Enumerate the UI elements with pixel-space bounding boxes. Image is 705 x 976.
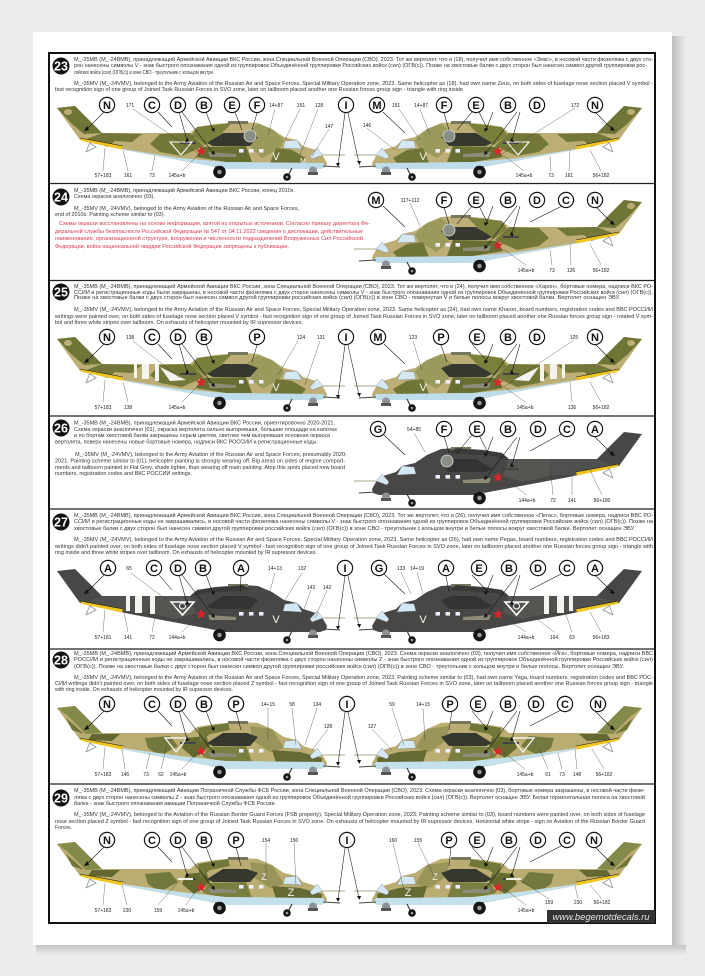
callouts 27: 65 xyxy=(126,566,132,572)
callouts 29: N xyxy=(590,835,598,847)
callouts 24: M xyxy=(371,195,381,207)
English description 24 xyxy=(55,206,299,218)
Russian description 23: М_-35МВ (М_-24ВМВ), принадлежащий Армейской Авиации ВКС России, зона Специальной Военной Операции (СВО), 2023. Тот же вертолет, что и (18), получил имя собственное «Зевс», в носовой части фюзеляжа с двух сто- xyxy=(74,56,653,63)
callouts 25: B xyxy=(504,332,512,344)
badge 27 xyxy=(52,514,70,530)
callouts 28: 62 xyxy=(158,772,164,778)
callouts 26: 144a+b xyxy=(519,498,536,504)
callouts 27: 63 xyxy=(569,635,575,641)
callouts 29: D xyxy=(174,835,182,847)
callouts 26: C xyxy=(563,424,571,436)
callouts 23: 172 xyxy=(571,103,579,109)
callouts 28: N xyxy=(594,699,602,711)
badge 28: 28 xyxy=(54,654,68,668)
callouts 27 xyxy=(84,560,615,641)
Russian description 23 xyxy=(74,56,653,76)
callouts 27: B xyxy=(199,563,207,575)
panel: scheme 23 xyxy=(52,56,653,181)
callouts 24: 56+182 xyxy=(593,268,610,274)
callouts 24: 126 xyxy=(567,268,575,274)
English description 28 xyxy=(55,675,653,693)
English description 29: nose section placed Z symbol - fast recognition sign of one group of Joined Task Russian Forces in SVO zone. On exhausts of helicopter mounted by IR supressor devices. Horizontal white stripe - sign on Aviation of the Russian Border Guard xyxy=(55,819,645,825)
callouts 24: C xyxy=(562,195,570,207)
callouts 25: P xyxy=(253,332,261,344)
Russian description 23: сийских войск (сил) (ОГВ(с)) в зоне СВО - треугольник с кольцом внутри. xyxy=(74,69,214,76)
callouts 28: 14+15 xyxy=(261,702,275,708)
badge 25 xyxy=(52,284,70,300)
callouts 27: 14+19 xyxy=(410,566,424,572)
panel: scheme 29 xyxy=(52,787,645,917)
callouts 25: 56+182 xyxy=(593,405,610,411)
callouts 27: 72 xyxy=(149,635,155,641)
English description 25: bol and three white stripes over tailboom. On exhausts of helicopter mounted by IR supressor devices. xyxy=(55,320,303,326)
callouts 23: D xyxy=(174,100,182,112)
callouts 28: 128 xyxy=(324,724,332,730)
callouts 28: B xyxy=(200,699,208,711)
callouts 27: 132 xyxy=(298,566,306,572)
callouts 28: E xyxy=(474,699,482,711)
callouts 23: 145a+b xyxy=(516,173,533,179)
callouts 29: 155 xyxy=(414,838,422,844)
callouts 25: C xyxy=(148,332,156,344)
callouts 29: B xyxy=(505,835,513,847)
callouts 28: P xyxy=(232,699,240,711)
callouts 25: I xyxy=(344,332,348,344)
English description 25: writings were painted over, on both sides of fuselage nose section placed V symbol - fast recognition sign of one group of Joined Task Russian Forces in SVO zone, later on tailboom placed another one Russian forces group sign - rotated V sym- xyxy=(55,314,653,320)
callouts 27: A xyxy=(237,563,245,575)
callouts 23: 151 xyxy=(392,103,400,109)
callouts 29: N xyxy=(103,835,111,847)
callouts 28: 59 xyxy=(389,702,395,708)
callouts 25: D xyxy=(174,332,182,344)
callouts 27: G xyxy=(375,563,383,575)
helicopter right 23: V xyxy=(419,151,427,163)
helicopter left 29: Z xyxy=(261,872,267,882)
Russian description 26: М_-35МВ (М_-24ВМВ), принадлежащий Армейской Авиации ВКС России, ориентировочно 2020-2021. xyxy=(74,420,335,426)
callouts 25 xyxy=(84,329,615,411)
Russian description 25: М_-35МВ (М_-24ВМВ), принадлежащий Армейской Авиации ВКС России, зона Специальной Военной Операции (СВО), 2023. Тот же вертолет, что и (24), получил имя собственное «Харон», бортовые номера, надписи ВКС РО- xyxy=(74,283,653,290)
callouts 28: 134 xyxy=(313,702,321,708)
callouts 27: D xyxy=(174,563,182,575)
callouts 28: 14+15 xyxy=(416,702,430,708)
callouts 23: 147 xyxy=(325,124,333,130)
callouts 25: 124 xyxy=(297,335,305,341)
Russian description 29: ляжа с двух сторон нанесены символы Z - знак быстрого опознавания одной из группировок Объединённой группировки Российских войск (сил) (ОГВ(с)). Вертолет оснащен ЭВУ. Белая горизонтальная полоса на хвостовой xyxy=(74,794,645,801)
callouts 24: 117+112 xyxy=(401,198,420,204)
Russian description 28: М_-35МВ (М_-24ВМВ), принадлежащий Армейской Авиации ВКС России, зона Специальной Военной Операции (СВО), 2023. Схема окраски аналогично (03), получил имя собственное «Йга», бортовые номера, надписи ВВС xyxy=(74,649,653,657)
callouts 29: C xyxy=(148,835,156,847)
callouts 29: E xyxy=(473,835,481,847)
callouts 28: C xyxy=(561,699,569,711)
callouts 24: N xyxy=(591,195,599,207)
outer frame xyxy=(49,53,655,923)
callouts 26: E xyxy=(473,424,481,436)
callouts 23: E xyxy=(228,100,236,112)
red notice 24: деральной службы безопасности Российской Федерации № 547 от 04.11.2022 сведения о дислокации, действительные xyxy=(55,228,363,235)
callouts 28: C xyxy=(148,699,156,711)
callouts 25: 123 xyxy=(409,335,417,341)
panel: scheme 24 xyxy=(52,187,642,275)
Russian description 27: ССИИ и регистрационные коды не закрашивались, в носовой части фюзеляжа нанесены символы V - знак быстрого опознавания одной из группировок Объединённой группировки Российских войск (сил) (ОГВ(с)). Позже на xyxy=(74,518,653,525)
callouts 24: D xyxy=(533,195,541,207)
callouts 27: A xyxy=(591,563,599,575)
callouts 27: 133 xyxy=(397,566,405,572)
callouts 27: 57+181 xyxy=(95,635,112,641)
callouts 23: 171 xyxy=(126,103,134,109)
panel: scheme 25 xyxy=(52,283,653,412)
callouts 29: P xyxy=(232,835,240,847)
Russian description 28: (ОГВ(с)). Позже на хвостовые балки с двух сторон был нанесен символ другой группировки российских войск (сил) (ОГВ(с)) в зоне СВО - треугольник с кольцом внутри и белые полосы. Вертолет оснащен ЭВУ. xyxy=(74,663,624,670)
callouts 27: C xyxy=(563,563,571,575)
badge 29 xyxy=(52,790,70,806)
callouts 23: B xyxy=(504,100,512,112)
Russian description 25 xyxy=(74,283,653,301)
callouts 26: G xyxy=(374,424,382,436)
English description 28: with ring inside. On exhausts of helicopter mounted by IR supressor devices. xyxy=(55,687,233,693)
callouts 23: E xyxy=(472,100,480,112)
callouts 23: 14+87 xyxy=(414,103,428,109)
callouts 28: 145a+b xyxy=(517,772,534,778)
badge 26 xyxy=(52,420,70,436)
callouts 28: 58 xyxy=(289,702,295,708)
callouts 23: F xyxy=(441,100,448,112)
callouts 29: 230 xyxy=(123,908,131,914)
callouts 25: 57+183 xyxy=(95,405,112,411)
callouts 28: 57+183 xyxy=(95,772,112,778)
callouts 25: 136 xyxy=(568,405,576,411)
callouts 23: 57+183 xyxy=(95,173,112,179)
helicopter left 25: V xyxy=(272,382,280,394)
badge 24: 24 xyxy=(54,190,68,204)
Russian description 27 xyxy=(74,512,653,532)
callouts 25: 145a+b xyxy=(517,405,534,411)
helicopter right 26 xyxy=(354,432,642,507)
callouts 23: 161 xyxy=(124,173,132,179)
callouts 25: 138 xyxy=(126,335,134,341)
Russian description 28: РОССИИ и регистрационные коды не закрашивались, в носовой части фюзеляжа с двух сторон нанесены символы Z - знак быстрого опознавания одной из группировок Объединённой группировки Российских войск (сил) xyxy=(74,656,653,663)
callouts 29: 56+182 xyxy=(594,900,611,906)
callouts 29: 154 xyxy=(262,838,270,844)
English description 27: M_-35MV (M_-24VMV), belonged to the Army Aviation of the Russian Air and Space Forces, Special Military Operation zone, 2023. Same helicopter as (26), had own name Pegas, board numbers, registration codes and ВВС РОССИИ xyxy=(74,537,653,543)
Russian description 29: балке - знак быстрого опознавания авиации Пограничной Службы ФСБ России. xyxy=(74,800,276,807)
callouts 29: D xyxy=(534,835,542,847)
Russian description 28 xyxy=(74,649,653,670)
Russian description 27: хвостовые балки с двух сторон был нанесен символ другой группировки российских войск (сил) (ОГВ(с)) в зоне СВО - треугольник с кольцом внутри и белые полосы вокруг хвостовой балки. Вертолет оснащен ЭВУ. xyxy=(74,525,635,532)
Russian description 26: Схема окраски аналогично (01), окраска вертолета сильно выгоревшая, большие площади на капотах xyxy=(74,427,337,433)
callouts 29: 145a+b xyxy=(178,908,195,914)
helicopter right 27: V xyxy=(419,614,427,626)
Russian description 26 xyxy=(55,420,337,446)
callouts 28: 73 xyxy=(143,772,149,778)
callouts 28: B xyxy=(504,699,512,711)
callouts 26: 72 xyxy=(550,498,556,504)
callouts 28: 61 xyxy=(545,772,551,778)
callouts 23: 14+87 xyxy=(269,103,283,109)
helicopter left 27: V xyxy=(272,614,280,626)
callouts 25: 125 xyxy=(570,335,578,341)
callouts 25: P xyxy=(437,332,445,344)
callouts 27: 144a+b xyxy=(518,635,535,641)
callouts 23: M xyxy=(372,100,382,112)
callouts 25: E xyxy=(473,332,481,344)
callouts 27: E xyxy=(475,563,483,575)
callouts 29: 159 xyxy=(545,900,553,906)
callouts 23: I xyxy=(344,100,348,112)
callouts 27: 164 xyxy=(550,635,558,641)
callouts 27: C xyxy=(150,563,158,575)
English description 29: Forces. xyxy=(55,825,72,831)
Russian description 29 xyxy=(74,787,645,807)
callouts 29: P xyxy=(445,835,453,847)
Russian description 24 xyxy=(74,187,295,200)
callouts 26: F xyxy=(441,424,448,436)
callouts 24 xyxy=(368,192,615,274)
panel: scheme 27 xyxy=(52,512,653,644)
English description 28: СИИ writings didn't painted over, on both sides of fuselage nose section placed Z symbol - fast recognition sign of one group of Joined Task Russian Forces in SVO zone, later on tailboom placed another one Russian forces group sign - triangle xyxy=(55,681,653,687)
English description 27: writings didn't painted over, on both sides of fuselage nose section placed V symbol - fast recognition sign of one group of Joined Task Russian Forces in SVO zone, later on tailboom placed another one Russian forces group sign - triangle with xyxy=(55,544,653,550)
helicopter right 29 xyxy=(354,842,642,917)
English description 26 xyxy=(55,452,347,477)
helicopter left 29: Z xyxy=(288,887,295,899)
callouts 26: 141 xyxy=(568,498,576,504)
callouts 23: 73 xyxy=(548,173,554,179)
Russian description 25: ССИИ и регистрационные коды были закрашены, в носовой части фюзеляжа с двух сторон нанесены символы V - знак быстрого опознавания одной из группировок Объединённой группировки Российских войск (сил) (ОГВ(с)). xyxy=(74,289,653,296)
callouts 29: I xyxy=(345,835,349,847)
red notice 24: наименования, организационной структуре, вооружении и численности подразделений Вооруженных Сил Российской xyxy=(55,235,363,242)
badge 23: 23 xyxy=(54,60,68,74)
callouts 27: 142 xyxy=(323,585,331,591)
helicopter right 28 xyxy=(354,706,642,781)
callouts 24: 73 xyxy=(549,268,555,274)
callouts 23: N xyxy=(103,100,111,112)
English description 24: M_-35MV (M_-24VMV), belonged to the Army Aviation of the Russian Air and Space Forces, xyxy=(74,206,299,212)
helicopter left 23 xyxy=(57,106,345,181)
callouts 23: B xyxy=(200,100,208,112)
callouts 23: 73 xyxy=(149,173,155,179)
callouts 29: 230 xyxy=(574,900,582,906)
callouts 23: 161 xyxy=(565,173,573,179)
English description 28: M_-35MV (M_-24VMV), belonged to the Army Aviation of the Russian Air and Space Forces, Special Military Operation zone, 2023. Painting scheme similar to (03), had own name Yaga, board numbers, registration codes and ВВС РОС- xyxy=(74,675,653,681)
callouts 27: 56+183 xyxy=(593,635,610,641)
callouts 28: 145a+b xyxy=(170,772,187,778)
panel: scheme 26 xyxy=(52,420,642,507)
badge 23 xyxy=(52,58,70,74)
callouts 23: N xyxy=(591,100,599,112)
helicopter right 24 xyxy=(354,200,642,275)
callouts 26: D xyxy=(534,424,542,436)
helicopter right 27 xyxy=(354,569,642,644)
callouts 25: M xyxy=(373,332,383,344)
callouts 29: 159 xyxy=(154,908,162,914)
callouts 23: 145a+b xyxy=(169,173,186,179)
red notice 24 xyxy=(55,220,370,250)
English description 29 xyxy=(55,812,645,831)
callouts 29: 156 xyxy=(290,838,298,844)
callouts 23: C xyxy=(148,100,156,112)
callouts 28: 146 xyxy=(121,772,129,778)
callouts 23: D xyxy=(533,100,541,112)
callouts 24: 145a+b xyxy=(518,268,535,274)
callouts 25: D xyxy=(533,332,541,344)
callouts 27: 144a+b xyxy=(169,635,186,641)
callouts 26: B xyxy=(504,424,512,436)
helicopter right 23 xyxy=(354,106,642,181)
English description 26: 2021. Painting scheme similar to (01), helicopter painting is strongly wearing off. Big areas on sides of engine compart- xyxy=(55,458,345,464)
callouts 26 xyxy=(370,421,615,504)
helicopter left 25 xyxy=(57,337,345,412)
callouts 28: D xyxy=(174,699,182,711)
callouts 23: 56+182 xyxy=(593,173,610,179)
callouts 23: 128 xyxy=(315,103,323,109)
English description 23 xyxy=(55,81,653,93)
helicopter right 25: V xyxy=(419,382,427,394)
Russian description 25: Позже на хвостовые балки с двух сторон был нанесен символ другой группировки российских войск (сил) (ОГВ(с)) в зоне СВО - повернутая V и белые полосы вокруг хвостовой балки. Вертолет оснащен ЭВУ. xyxy=(74,294,620,301)
callouts 24: F xyxy=(441,195,448,207)
English description 29: M_-35MV (M_-24VMV), belonged to the Aviation of the Russian Border Guard Forces (FSB property), Special Military Operation zone, 2023. Painting scheme similar to (03), board numbers were painted over, on both sides of fuselage xyxy=(74,812,645,818)
badge 26: 26 xyxy=(54,422,68,436)
callouts 23: 146 xyxy=(363,123,371,129)
callouts 28: I xyxy=(345,699,349,711)
badge 27: 27 xyxy=(54,516,68,530)
callouts 27: 141 xyxy=(124,635,132,641)
callouts 27: B xyxy=(505,563,513,575)
callouts 29: 160 xyxy=(389,838,397,844)
callouts 25: 131 xyxy=(317,335,325,341)
English description 27 xyxy=(55,537,653,556)
Russian description 24: Схема окраски аналогично (03). xyxy=(74,194,155,200)
English description 23: M_-35MV (M_-24VMV), belonged to the Army Aviation of the Russian Air and Space Forces, Special Military Operation zone, 2023. Same helicopter as (18), had own name Zeus, on both sides of fuselage nose section placed V symbol - xyxy=(74,81,653,87)
Russian description 24: М_-35МВ (М_-24ВМВ), принадлежащий Армейской Авиации ВКС России, конец 2010х. xyxy=(74,187,295,194)
callouts 26: A xyxy=(591,424,599,436)
English description 26: numbers, registration codes and ВКС РОССИИ writings. xyxy=(55,471,192,477)
English description 23: fast recognition sign of one group of Joined Task Russian Forces in SVO zone, later on tailboom placed another one Russian forces group sign - triangle with ring inside xyxy=(55,87,463,93)
helicopter right 29: Z xyxy=(432,872,438,882)
helicopter right 25 xyxy=(354,337,642,412)
helicopter left 28 xyxy=(57,706,345,781)
English description 24: end of 2010s. Painting scheme similar to (03). xyxy=(55,212,165,218)
English description 25: M_-35MV (M_-24VMV), belonged to the Army Aviation of the Russian Air and Space Forces, Special Military Operation zone, 2023. Same helicopter as (24), had own name Kharon, board numbers, registration codes and ВВС РОССИИ xyxy=(74,307,653,313)
callouts 28: 73 xyxy=(559,772,565,778)
callouts 28: 56+182 xyxy=(596,772,613,778)
callouts 27: 14+13 xyxy=(268,566,282,572)
callouts 27: I xyxy=(343,563,347,575)
callouts 28: N xyxy=(103,699,111,711)
badge 25: 25 xyxy=(54,286,68,300)
callouts 29 xyxy=(84,832,615,914)
callouts 23 xyxy=(84,97,615,179)
callouts 28: P xyxy=(446,699,454,711)
English description 25 xyxy=(55,307,653,326)
badge 29: 29 xyxy=(54,792,68,806)
callouts 27: 143 xyxy=(307,585,315,591)
callouts 29: 57+183 xyxy=(95,908,112,914)
English description 27: ring inside and three white stripes over tailboom. On exhausts of helicopter mounted by IR supressor devices. xyxy=(55,550,317,556)
callouts 29: B xyxy=(200,835,208,847)
callouts 29: 145a+b xyxy=(518,908,535,914)
Russian description 23: рон нанесены символы V - знак быстрого опознавания одной из группировок Объединённой группировки Российских войск (сил) (ОГВ(с)). Позже на хвостовые балки с двух сторон был нанесен символ другой группировки рос- xyxy=(74,62,647,69)
callouts 28 xyxy=(84,696,615,778)
callouts 23: 151 xyxy=(297,103,305,109)
callouts 24: B xyxy=(504,195,512,207)
callouts 29: C xyxy=(563,835,571,847)
callouts 25: N xyxy=(591,332,599,344)
helicopter right 29: Z xyxy=(405,887,412,899)
callouts 27: D xyxy=(534,563,542,575)
Russian description 27: М_-35МВ (М_-24ВМВ), принадлежащий Армейской Авиации ВКС России, зона Специальной Военной Операции (СВО), 2023. Тот же вертолет, что и (26), получил имя собственное «Пегас», бортовые номера, надписи ВВС РО- xyxy=(74,512,653,519)
callouts 25: 145a+b xyxy=(169,405,186,411)
helicopter left 23: V xyxy=(272,151,280,163)
callouts 25: N xyxy=(103,332,111,344)
Russian description 26: и по бортам хвостовой балки закрашены серым цветом, светлее чем выгоревшая основная окраска xyxy=(74,432,330,439)
website badge: www.begemotdecals.ru xyxy=(553,911,650,922)
English description 26: M_-35MV (M_-24VMV), belonged to the Army Aviation of the Russian Air and Space Forces, presumably 2020- xyxy=(75,452,347,458)
callouts 26: 54+85 xyxy=(407,427,421,433)
callouts 23: F xyxy=(254,100,261,112)
callouts 24: E xyxy=(472,195,480,207)
callouts 27: A xyxy=(104,563,112,575)
red notice 24: Схемы окраски восстановлены на основе информации, взятой из открытых источников. Согласно приказу директора Фе- xyxy=(59,220,370,227)
badge 28 xyxy=(52,652,70,668)
callouts 25: 138 xyxy=(124,405,132,411)
callouts 25: B xyxy=(200,332,208,344)
red notice 24: Федерации, войск национальной гвардии Российской Федерации запрещены к публикации. xyxy=(55,243,289,250)
callouts 27: A xyxy=(442,563,450,575)
callouts 28: 127 xyxy=(368,724,376,730)
callouts 28: 148 xyxy=(573,772,581,778)
English description 26: ments and tailboom painted in Flat Grey, shade lighter, than wearing off main painting. Atop this spots placed new board xyxy=(55,465,345,471)
helicopter left 27 xyxy=(57,569,345,644)
Russian description 29: М_-35МВ (М_-24ВМВ), принадлежащий Авиации Пограничной Службы ФСБ России, зона Специальной Военной Операции (СВО), 2023. Схема окраски аналогично (03), бортовые номера закрашены, в носовой части фюзе- xyxy=(74,787,645,794)
callouts 26: 56+180 xyxy=(594,498,611,504)
helicopter left 29 xyxy=(57,842,345,917)
panel: scheme 28 xyxy=(52,649,653,781)
Russian description 26: вертолета, поверх нанесены новые бортовые номера, надписи ВКС РОССИИ и регистрационные коды. xyxy=(55,440,318,446)
helicopter left 23: M xyxy=(300,158,306,165)
badge 24 xyxy=(52,188,70,206)
callouts 28: D xyxy=(532,699,540,711)
